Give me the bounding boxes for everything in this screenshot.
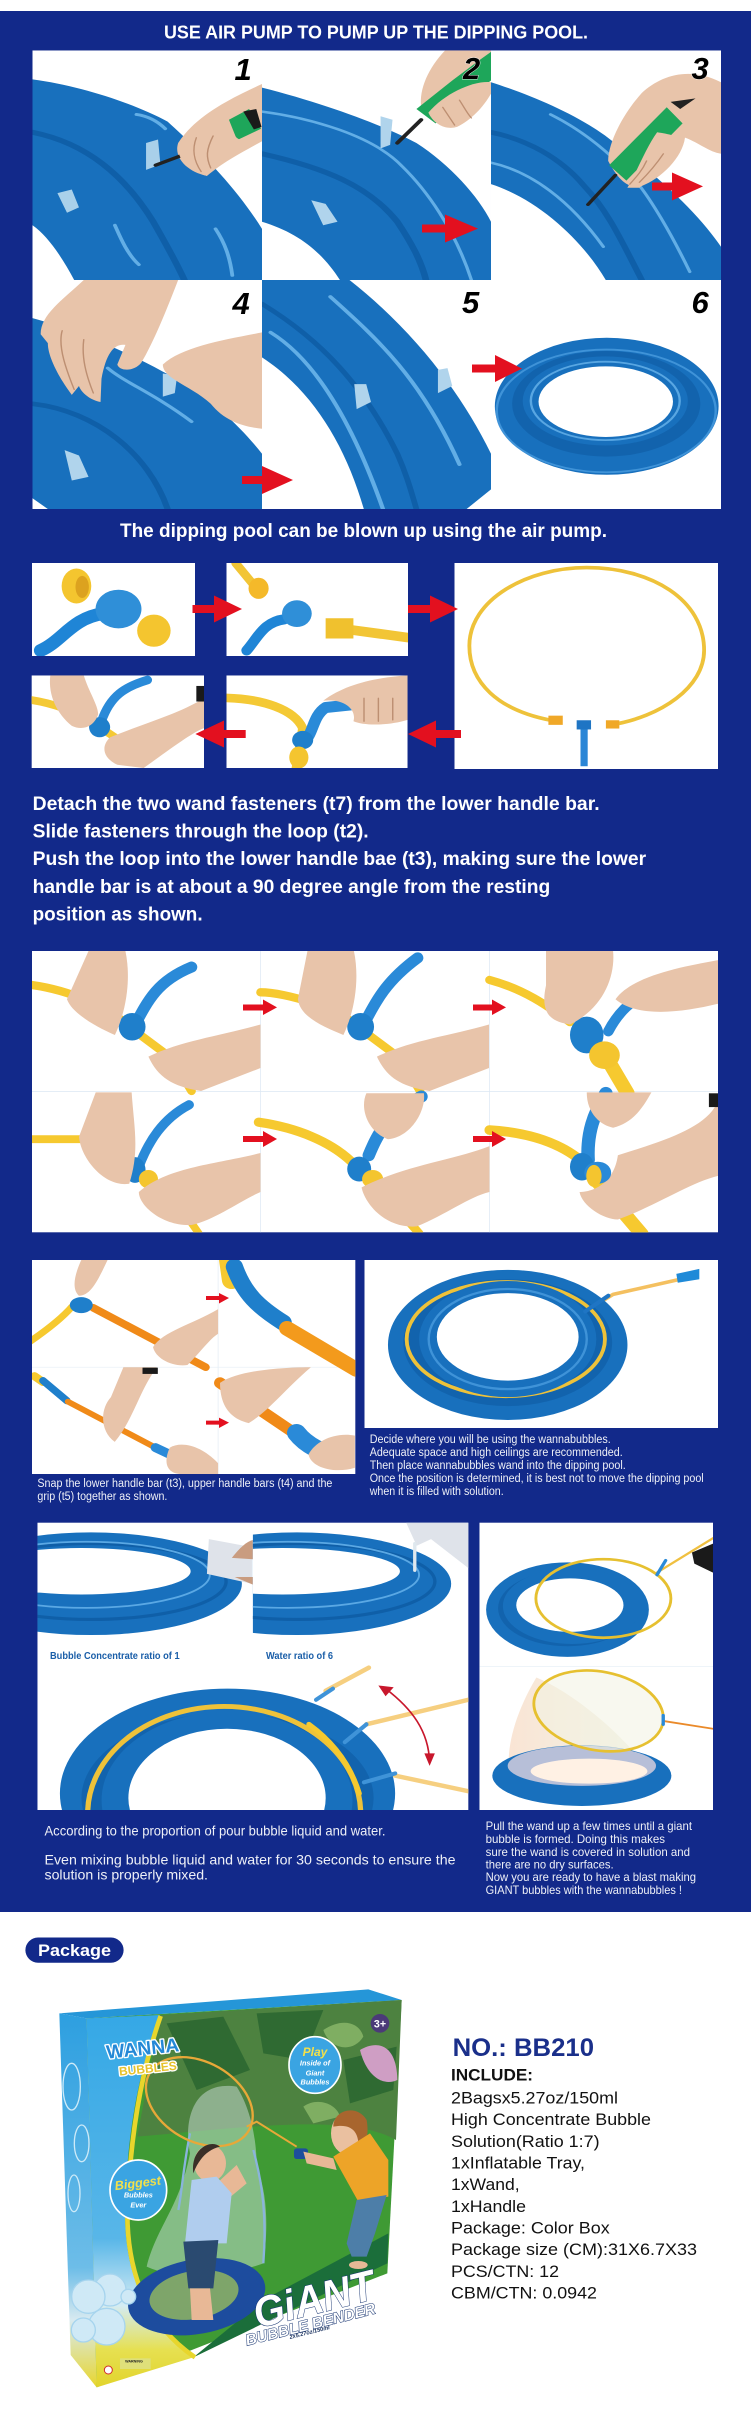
product name: BUBBLE BENDER (244, 2301, 377, 2349)
loop end (236, 563, 254, 585)
text: pull the wand: Now you are ready to have a blast making (486, 1870, 696, 1884)
instruction text: wand fasteners: Slide fasteners through the loop (t2). (33, 821, 369, 843)
caption: placement: Once the position is determined, it is best not to move the dipping pool (370, 1473, 704, 1485)
red double arrow (386, 1689, 430, 1762)
cell 1 (29, 951, 261, 1091)
age mark: 3+ (374, 2018, 386, 2030)
badge: biggest: Bubbles (124, 2190, 153, 2199)
caption: dipping pool: The dipping pool can be blown up using the air pump. (120, 521, 607, 542)
pump (229, 109, 261, 140)
badge: play: Giant (306, 2068, 325, 2077)
text: pull the wand: GIANT bubbles with the wannabubbles ! (486, 1883, 682, 1897)
caption: placement: Then place wannabubbles wand into the dipping pool. (370, 1460, 626, 1472)
box front photo (87, 2000, 402, 2387)
ring with loop (486, 1538, 713, 1657)
caption: placement: Adequate space and high ceilings are recommended. (370, 1447, 623, 1459)
cell b (229, 1260, 356, 1369)
wand handle (589, 1279, 680, 1309)
step numbers: 5 (462, 285, 480, 320)
step numbers: 1 (234, 52, 252, 87)
cell 6 (489, 1092, 718, 1234)
specification list: High Concentrate Bubble (451, 2110, 651, 2129)
specification list: Solution(Ratio 1:7) (451, 2132, 600, 2151)
red arrows: pump steps (242, 172, 703, 494)
badge: biggest: Biggest (114, 2173, 163, 2193)
text: proportion and mixing: Even mixing bubble liquid and water for 30 seconds to ensure the (44, 1852, 456, 1868)
box top face (59, 1989, 402, 2018)
step numbers (232, 51, 710, 321)
step numbers: 4 (232, 286, 250, 321)
panel: wand fasteners detached (32, 563, 195, 656)
badge: play: Play (303, 2045, 329, 2059)
panel: step 1 inflating (32, 50, 262, 280)
cell d (220, 1367, 355, 1470)
panel: snap handle bars together (32, 1260, 356, 1474)
badge: play: Inside of (300, 2058, 332, 2067)
hand (323, 675, 408, 725)
hands (50, 675, 98, 728)
specification list: 1xInflatable Tray, (451, 2154, 585, 2172)
text: proportion and mixing: According to the proportion of pour bubble liquid and water. (44, 1822, 386, 1838)
pool ring (32, 79, 262, 280)
text: pull the wand: there are no dry surfaces. (486, 1858, 614, 1872)
text: pull the wand: sure the wand is covered in solution and (486, 1845, 690, 1859)
model number: NO.: BB210 (453, 2034, 594, 2062)
hands (41, 280, 178, 402)
fingers (428, 82, 491, 128)
caption: placement (369, 1434, 704, 1498)
loop end (340, 628, 408, 638)
panel: full loop (454, 563, 718, 769)
fastener (137, 615, 171, 647)
pool ring (491, 82, 721, 280)
panel: mixing solution (37, 1522, 468, 1810)
blue handle (247, 619, 285, 650)
label: concentrate ratio: Bubble Concentrate ratio of 1 (50, 1650, 180, 1662)
instruction text: wand fasteners: Detach the two wand fasteners (t7) from the lower handle bar. (33, 793, 600, 815)
pool ring (262, 280, 491, 509)
child in bubble (183, 2144, 247, 2320)
panel: six step wand assembly (32, 951, 718, 1232)
giant bubble (147, 2086, 266, 2276)
package pill heading: Package (38, 1941, 111, 1960)
valve (57, 139, 160, 213)
label: water ratio: Water ratio of 6 (266, 1650, 333, 1662)
text: proportion and mixing: solution is properly mixed. (44, 1866, 208, 1882)
product name: GiANT (248, 2261, 383, 2338)
panel: step 3 inflating (491, 50, 721, 280)
wand loop (130, 2039, 308, 2164)
logo: BUBBLES (118, 2059, 177, 2079)
pool ring (262, 88, 491, 280)
instruction text: wand fasteners: handle bar is at about a 90 degree angle from the resting (33, 876, 550, 898)
badge: biggest: Ever (130, 2200, 147, 2209)
cell 5 (259, 1093, 489, 1233)
caption: snap handle: Snap the lower handle bar (t3), upper handle bars (t4) and the (37, 1478, 332, 1490)
text: pull the wand: Pull the wand up a few times until a giant (486, 1819, 693, 1833)
inflated ring (388, 1270, 627, 1420)
yellow loop (469, 568, 704, 725)
specification list: Package size (CM):31X6.7X33 (451, 2240, 697, 2259)
step numbers: 2 (462, 51, 480, 86)
blue handle (581, 726, 588, 766)
package box (59, 1989, 402, 2387)
badge: play (289, 2037, 341, 2093)
specification list: 2Bagsx5.27oz/150ml (451, 2088, 618, 2108)
yellow loop (407, 1282, 605, 1396)
badge: play: Bubbles (301, 2078, 329, 2087)
panel: pull wand up bubble (479, 1522, 713, 1810)
red arrows: handle bars (206, 1293, 229, 1428)
red arrows: six step (243, 1000, 506, 1147)
badge: biggest (110, 2160, 167, 2220)
caption: snap handle (37, 1478, 332, 1503)
specification list: PCS/CTN: 12 (451, 2262, 559, 2281)
pouring concentrate (37, 1532, 253, 1635)
pouring water (252, 1522, 468, 1635)
instruction text: wand fasteners (33, 793, 646, 926)
bubble cluster (71, 2274, 136, 2345)
instruction text: wand fasteners: position as shown. (33, 904, 203, 926)
hand (177, 84, 262, 176)
inflatable tray (122, 2248, 271, 2345)
cell 2 (261, 951, 489, 1091)
cell 4 (29, 1092, 261, 1233)
panel: step 5 inflating (262, 280, 491, 509)
panel: wand in dipping pool (364, 1260, 718, 1428)
cell a (30, 1260, 218, 1367)
logo: WANNA (105, 2035, 180, 2064)
warning label (104, 2358, 151, 2374)
yellow tube (223, 698, 303, 769)
spine bubbles (63, 2063, 89, 2212)
ring with wand positions (60, 1668, 468, 1921)
step numbers: 6 (692, 285, 710, 320)
heading: use air pump: USE AIR PUMP TO PUMP UP THE DIPPING POOL. (164, 22, 588, 42)
package pill heading (25, 1938, 124, 1963)
caption: placement: Decide where you will be using the wannabubbles. (370, 1434, 611, 1446)
text: pull the wand (486, 1819, 696, 1897)
specification list (451, 2066, 697, 2302)
step numbers: 3 (692, 51, 709, 86)
blue handle (41, 614, 103, 650)
fingers (178, 120, 239, 176)
include heading: INCLUDE: (451, 2066, 533, 2084)
blue instruction background band (0, 11, 751, 1912)
logo (105, 2035, 180, 2079)
red arrows: wand assembly (192, 596, 461, 748)
inflated ring (495, 338, 719, 475)
fastener (62, 569, 91, 604)
child with wand (303, 2110, 388, 2269)
specification list: Package: Color Box (451, 2218, 610, 2238)
pump (416, 52, 491, 123)
age mark (371, 2014, 389, 2033)
specification list: 1xHandle (451, 2197, 526, 2216)
pump (609, 107, 683, 181)
panel: step 6 inflated pool (491, 280, 721, 509)
warning label: WARNING (125, 2360, 143, 2364)
box spine (59, 2013, 97, 2387)
product name: 2x5.27oz/150ml (288, 2325, 331, 2341)
bubble from tray (492, 1660, 713, 1806)
hand (421, 50, 491, 107)
specification list: CBM/CTN: 0.0942 (451, 2284, 597, 2302)
text: pull the wand: bubble is formed. Doing this makes (486, 1832, 665, 1846)
caption: snap handle: grip (t5) together as shown. (37, 1491, 167, 1503)
panel: step 2 inflating (262, 50, 491, 280)
blue handle (303, 704, 357, 741)
panel: fasteners on loop (226, 563, 408, 656)
cell c (34, 1367, 218, 1474)
text: proportion and mixing (44, 1822, 456, 1882)
panel: handle rotated (226, 675, 408, 768)
blue handle (102, 680, 147, 721)
specification list: 1xWand, (451, 2175, 520, 2194)
panel: step 4 inflating (32, 280, 262, 509)
panel: loop pushed in handle (32, 675, 204, 768)
cell 3 (489, 951, 718, 1093)
instruction text: wand fasteners: Push the loop into the lower handle bae (t3), making sure the lower (33, 848, 646, 870)
hand (608, 74, 721, 187)
pool ring (32, 318, 262, 509)
yellow tube (29, 700, 115, 737)
caption: placement: when it is filled with solution. (369, 1486, 504, 1498)
